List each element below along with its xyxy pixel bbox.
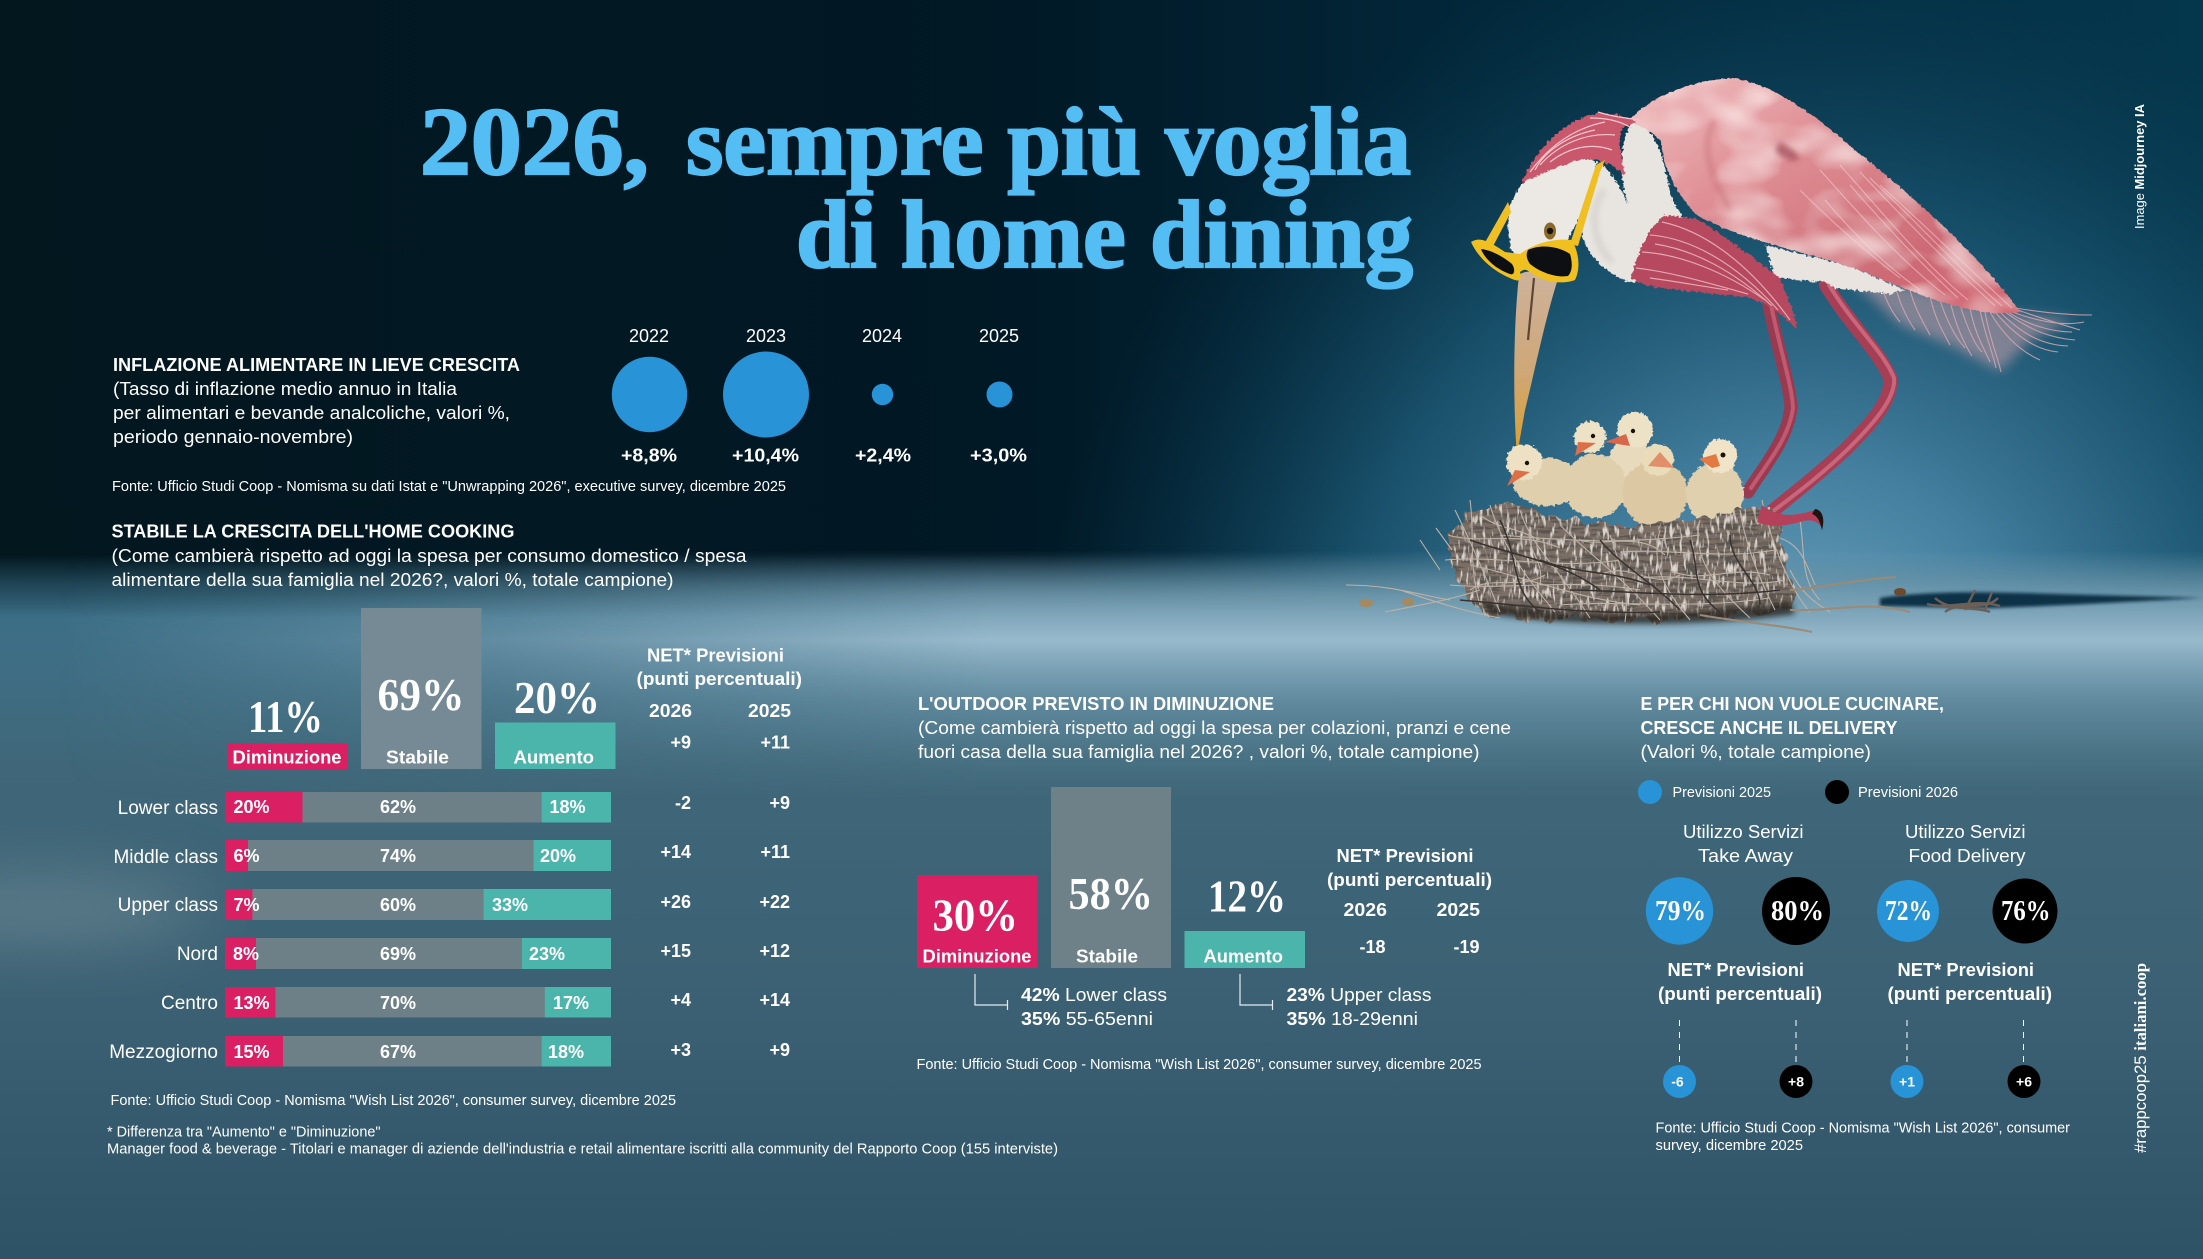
description: delivery: (Valori %, totale campione) xyxy=(1640,742,1871,762)
bar: lower class: 20% xyxy=(234,797,270,817)
bar chart: outdoor: 12% xyxy=(1208,870,1286,922)
bubble chart: inflation by year: +8,8% xyxy=(621,446,677,466)
column: food delivery: (punti percentuali) xyxy=(1888,984,2052,1004)
bar chart: outdoor: 58% xyxy=(1068,868,1153,919)
table: NET outdoor: 2025 xyxy=(1436,900,1480,920)
bubble chart: inflation by year: 2023 xyxy=(746,326,786,346)
bar chart: outdoor: 30% xyxy=(932,890,1018,940)
callout: diminuzione detail: 42% Lower class xyxy=(1021,985,1167,1005)
description: inflation: periodo gennaio-novembre) xyxy=(113,427,353,447)
column: take away: 79% xyxy=(1655,896,1706,927)
source: inflation: Fonte: Ufficio Studi Coop - Nomisma su dati Istat e "Unwrapping 2026", executive survey, dicembre 2025 xyxy=(112,479,786,495)
source: delivery: Fonte: Ufficio Studi Coop - Nomisma "Wish List 2026", consumer xyxy=(1656,1120,2070,1136)
source: delivery xyxy=(1656,1120,2070,1154)
pink wing xyxy=(1628,78,2021,314)
bubble chart: inflation by year: 2024 xyxy=(862,326,902,346)
foot xyxy=(1757,505,1823,530)
column: food delivery: Utilizzo Servizi xyxy=(1905,822,2026,842)
bar: mezzogiorno: Mezzogiorno xyxy=(109,1042,218,1063)
bubble chart: inflation by year: +2,4% xyxy=(855,446,911,466)
column: take away: 80% xyxy=(1771,896,1824,927)
right leg xyxy=(1768,285,1890,515)
legend: Previsioni 2026 xyxy=(1858,785,1958,801)
description: inflation: per alimentari e bevande analcoliche, valori %, xyxy=(113,403,510,423)
bar: nord: Nord xyxy=(177,944,218,965)
table: NET forecasts: +26 xyxy=(660,892,691,912)
bubble chart: inflation by year: +3,0% xyxy=(970,446,1027,466)
bar chart: outdoor: Stabile xyxy=(1076,946,1138,966)
table: NET forecasts: NET* Previsioni xyxy=(647,646,784,666)
wing feather detail xyxy=(1800,165,2012,308)
heading: delivery: E PER CHI NON VUOLE CUCINARE, xyxy=(1640,694,1944,714)
table: NET outdoor: -18 xyxy=(1359,937,1386,957)
bar: upper class: Upper class xyxy=(118,895,218,916)
title: 2026, xyxy=(420,88,649,195)
table: NET forecasts xyxy=(636,646,802,1060)
heading: delivery xyxy=(1640,694,1944,738)
bar: upper class: 60% xyxy=(380,895,416,915)
panel: home cooking xyxy=(109,522,802,1109)
description: outdoor: (Come cambierà rispetto ad oggi la spesa per colazioni, pranzi e cene xyxy=(918,718,1511,738)
bar chart: total sample: 11% xyxy=(248,691,323,742)
image credit: Image Midjourney IA xyxy=(2133,104,2147,229)
table: NET forecasts: +12 xyxy=(759,941,790,961)
crest xyxy=(1522,113,1636,182)
heading: home cooking: STABILE LA CRESCITA DELL'HOME COOKING xyxy=(112,522,514,542)
beak xyxy=(1514,271,1557,455)
callout: aumento detail xyxy=(1240,974,1432,1029)
table: NET forecasts: +9 xyxy=(769,793,790,813)
legend: Previsioni 2025 xyxy=(1672,785,1771,801)
bar: mezzogiorno: 18% xyxy=(548,1042,584,1062)
bar: lower class: Lower class xyxy=(118,798,218,819)
table: NET forecasts: +11 xyxy=(760,732,790,752)
description: home cooking: alimentare della sua famiglia nel 2026?, valori %, totale campione) xyxy=(112,570,674,590)
description: home cooking: (Come cambierà rispetto ad oggi la spesa per consumo domestico / spesa xyxy=(112,546,748,566)
table: NET outdoor: NET* Previsioni xyxy=(1336,846,1474,866)
title: di home dining xyxy=(796,181,1413,288)
table: NET forecasts: 2025 xyxy=(748,701,791,721)
bar: middle class: 20% xyxy=(540,846,576,866)
bubble chart: inflation by year xyxy=(612,326,1027,466)
heading: outdoor: L'OUTDOOR PREVISTO IN DIMINUZIONE xyxy=(918,694,1274,714)
column: food delivery xyxy=(1877,822,2058,1098)
heading: inflation: INFLAZIONE ALIMENTARE IN LIEVE CRESCITA xyxy=(113,355,520,375)
title: sempre più voglia xyxy=(686,88,1411,195)
column: take away: NET* Previsioni xyxy=(1668,960,1804,980)
bar: lower class: 18% xyxy=(550,797,586,817)
source: home cooking: Fonte: Ufficio Studi Coop - Nomisma "Wish List 2026", consumer survey, dicembre 2025 xyxy=(110,1093,676,1109)
callout: diminuzione detail xyxy=(975,974,1167,1029)
bar: middle class xyxy=(113,840,611,871)
bar chart: outdoor xyxy=(917,787,1305,968)
white belly xyxy=(1765,245,1905,294)
column: take away: +8 xyxy=(1788,1074,1804,1090)
source: outdoor: Fonte: Ufficio Studi Coop - Nomisma "Wish List 2026", consumer survey, dicembre 2025 xyxy=(916,1057,1482,1073)
column: food delivery: 76% xyxy=(2001,896,2050,927)
column: food delivery: Food Delivery xyxy=(1908,846,2026,866)
column: food delivery: +6 xyxy=(2016,1074,2032,1090)
column: take away: Utilizzo Servizi xyxy=(1683,822,1804,842)
column: take away: Take Away xyxy=(1698,846,1793,866)
bar: centro: 13% xyxy=(234,993,270,1013)
bubble chart: inflation by year: 2025 xyxy=(979,326,1019,346)
nest xyxy=(1346,500,2000,632)
head xyxy=(1508,157,1597,262)
table: NET forecasts: -2 xyxy=(675,793,691,813)
panel: outdoor xyxy=(916,694,1511,1073)
bubble chart: inflation by year: +10,4% xyxy=(732,446,799,466)
column: take away: (punti percentuali) xyxy=(1658,984,1822,1004)
bubble chart: inflation by year: 2022 xyxy=(629,326,669,346)
bar: middle class: 6% xyxy=(234,846,260,866)
bar: nord xyxy=(177,938,611,969)
heading: delivery: CRESCE ANCHE IL DELIVERY xyxy=(1640,718,1898,738)
table: NET forecasts: 2026 xyxy=(649,701,692,721)
bar: mezzogiorno: 67% xyxy=(380,1042,416,1062)
bar chart: total sample: Diminuzione xyxy=(232,748,342,768)
column: take away xyxy=(1646,822,1830,1098)
column: take away: -6 xyxy=(1671,1074,1684,1090)
ground shadow xyxy=(1880,592,2203,608)
description: inflation: (Tasso di inflazione medio annuo in Italia xyxy=(113,379,458,399)
legend xyxy=(1638,780,1958,804)
left leg xyxy=(1748,285,1894,515)
bar: upper class: 7% xyxy=(234,895,260,915)
bar chart: total sample: 69% xyxy=(378,669,464,720)
bar: nord: 23% xyxy=(529,944,565,964)
sunglasses xyxy=(1471,160,1605,282)
table: NET forecasts: +9 xyxy=(769,1040,790,1060)
bar: centro: Centro xyxy=(161,993,218,1014)
bar: mezzogiorno: 15% xyxy=(234,1042,270,1062)
table: NET outdoor xyxy=(1327,846,1492,957)
bar chart: outdoor: Diminuzione xyxy=(922,946,1032,966)
footnote xyxy=(107,1124,1058,1158)
title xyxy=(420,88,1413,288)
red chest feathers xyxy=(1631,215,1797,330)
eye xyxy=(1544,222,1556,240)
bar chart: total sample: 20% xyxy=(514,672,600,723)
column: food delivery: NET* Previsioni xyxy=(1898,960,2034,980)
table: NET forecasts: +15 xyxy=(660,941,691,961)
tail skirt xyxy=(1830,260,2075,371)
bar: lower class: 62% xyxy=(380,797,416,817)
panel: food inflation xyxy=(112,326,1027,495)
source: delivery: survey, dicembre 2025 xyxy=(1656,1138,1803,1154)
table: NET forecasts: +11 xyxy=(760,842,790,862)
table: NET outdoor: -19 xyxy=(1453,937,1480,957)
callout: aumento detail: 23% Upper class xyxy=(1286,985,1432,1005)
illustration: flamingo with sunglasses feeding chicks in a nest xyxy=(1346,78,2203,632)
table: NET forecasts: +14 xyxy=(660,842,691,862)
tail wisps xyxy=(1880,280,2092,372)
bar chart: total sample: Aumento xyxy=(514,748,594,768)
table: NET forecasts: +14 xyxy=(759,990,790,1010)
hashtag: #rappcoop25 italiani.coop xyxy=(2131,963,2150,1153)
white neck and shoulder xyxy=(1578,122,1706,283)
bar: centro: 70% xyxy=(380,993,416,1013)
stacked bars by segment xyxy=(109,792,611,1066)
panel: delivery xyxy=(1638,694,2070,1154)
bar: nord: 69% xyxy=(380,944,416,964)
table: NET forecasts: +9 xyxy=(670,732,691,752)
description: inflation xyxy=(113,379,510,447)
callout: aumento detail: 35% 18-29enni xyxy=(1286,1009,1418,1029)
table: NET outdoor: 2026 xyxy=(1344,900,1387,920)
bar: upper class: 33% xyxy=(492,895,528,915)
bar: centro xyxy=(161,987,611,1018)
chicks xyxy=(1506,412,1744,527)
description: outdoor: fuori casa della sua famiglia nel 2026? , valori %, totale campione) xyxy=(918,742,1480,762)
bar: upper class xyxy=(118,889,611,920)
footnote: Manager food & beverage - Titolari e manager di aziende dell'industria e retail alimentare iscritti alla community del Rapporto Coop (155 interviste) xyxy=(107,1142,1058,1158)
column: food delivery: +1 xyxy=(1899,1074,1915,1090)
table: NET outdoor: (punti percentuali) xyxy=(1327,870,1492,890)
bar chart: total sample xyxy=(228,608,616,769)
description: outdoor xyxy=(918,718,1511,762)
description: home cooking xyxy=(112,546,748,590)
table: NET forecasts: +4 xyxy=(670,990,691,1010)
bar: nord: 8% xyxy=(233,944,259,964)
table: NET forecasts: (punti percentuali) xyxy=(636,669,802,689)
table: NET forecasts: +22 xyxy=(759,892,790,912)
table: NET forecasts: +3 xyxy=(670,1040,691,1060)
footnote: * Differenza tra "Aumento" e "Diminuzione" xyxy=(107,1124,380,1140)
bar: middle class: Middle class xyxy=(113,847,218,868)
bar: lower class xyxy=(118,792,611,822)
bar chart: outdoor: Aumento xyxy=(1204,946,1283,966)
bar: centro: 17% xyxy=(553,993,589,1013)
bar: mezzogiorno xyxy=(109,1036,611,1066)
column: food delivery: 72% xyxy=(1885,896,1932,927)
callout: diminuzione detail: 35% 55-65enni xyxy=(1021,1009,1153,1029)
bar chart: total sample: Stabile xyxy=(386,748,449,768)
bar: middle class: 74% xyxy=(380,846,416,866)
